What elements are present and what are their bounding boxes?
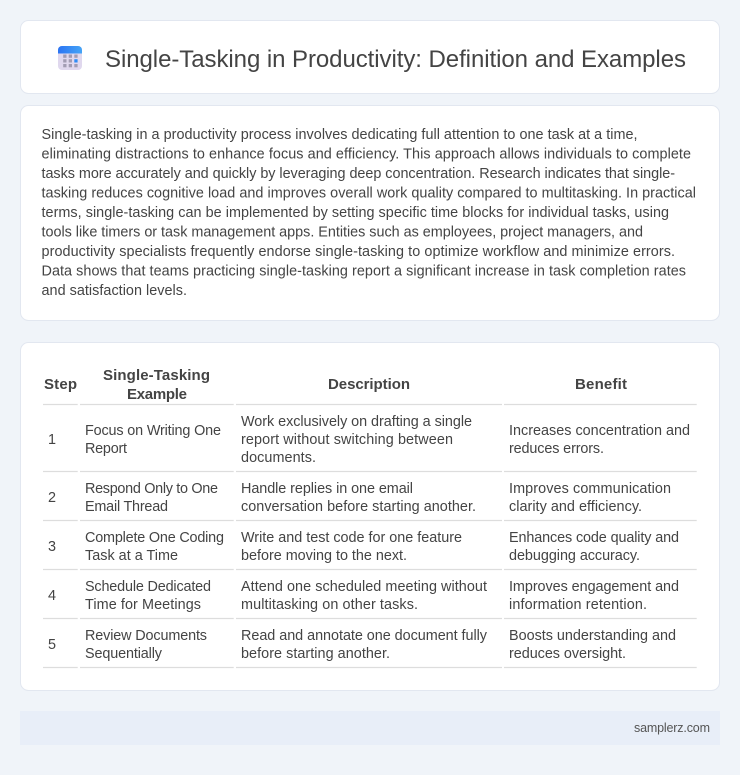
- table row 1: Report: [85, 441, 127, 457]
- text block: definition: and satisfaction levels.: [42, 283, 187, 299]
- text block: definition: productivity specialists frequently endorse single-tasking to optimize workflow and minimize errors.: [42, 244, 675, 260]
- table row 4: Time for Meetings: [85, 597, 201, 613]
- table row 4: information retention.: [509, 597, 647, 613]
- table row 4: Improves engagement and: [509, 579, 679, 595]
- table row 5: Sequentially: [85, 646, 163, 662]
- table row 2: Email Thread: [85, 499, 168, 515]
- table row 5: 5: [48, 637, 56, 653]
- table row 3: Complete One Coding: [85, 530, 224, 546]
- table row 2: [48, 481, 671, 515]
- table row 5: Boosts understanding and: [509, 628, 676, 644]
- table row 4: Attend one scheduled meeting without: [241, 579, 487, 595]
- table row 1: report without switching between: [241, 432, 453, 448]
- text block: definition: eliminating distractions to enhance focus and efficiency. This approach allows individuals to complete: [42, 146, 691, 162]
- table row 2: Respond Only to One: [85, 481, 218, 497]
- header card: [20, 20, 720, 94]
- icon: calendar: [58, 46, 82, 70]
- footer bar: [20, 711, 720, 745]
- table header row: Benefit: [575, 376, 627, 393]
- table row 2: clarity and efficiency.: [509, 499, 642, 515]
- table row 4: Schedule Dedicated: [85, 579, 211, 595]
- table row 5: [48, 628, 676, 662]
- table row 1: [48, 414, 690, 466]
- table row 4: 4: [48, 588, 56, 604]
- text block: definition: Single-tasking in a productivity process involves dedicating full attention to one task at a time,: [42, 127, 638, 143]
- table row 3: [48, 530, 679, 564]
- table row 1: documents.: [241, 450, 316, 466]
- table row 1: 1: [48, 432, 56, 448]
- text block: definition: tasking reduces cognitive load and improves overall work quality compared to multitasking. In practical: [42, 186, 696, 202]
- table row 2: Handle replies in one email: [241, 481, 413, 497]
- footer text: samplerz.com: [634, 721, 710, 735]
- table header row: Single-Tasking: [103, 367, 210, 384]
- panel: examples table: [20, 342, 720, 690]
- panel: intro paragraph: [20, 106, 720, 320]
- table row 3: debugging accuracy.: [509, 548, 640, 564]
- table row 1: Increases concentration and: [509, 423, 690, 439]
- table row 5: Review Documents: [85, 628, 207, 644]
- table row lines: [43, 404, 697, 668]
- table row 5: Read and annotate one document fully: [241, 628, 488, 644]
- table row 1: reduces errors.: [509, 441, 604, 457]
- table row 3: Write and test code for one feature: [241, 530, 462, 546]
- table header row: Description: [328, 376, 410, 393]
- title: Single-Tasking in Productivity: Definition and Examples: [105, 46, 686, 73]
- table header row: [44, 367, 627, 403]
- text block: definition: tasks more accurately and quickly by leveraging deep concentration. Research indicates that single-: [42, 166, 675, 182]
- table row 1: Work exclusively on drafting a single: [241, 414, 472, 430]
- table row 3: 3: [48, 539, 56, 555]
- table row 4: [48, 579, 679, 613]
- text block: definition: Data shows that teams practicing single-tasking report a significant increase in task completion rates: [42, 264, 686, 280]
- table row 5: before starting another.: [241, 646, 390, 662]
- table row 2: 2: [48, 490, 56, 506]
- text block: definition: terms, single-tasking can be implemented by setting specific time blocks for individual tasks, using: [42, 205, 669, 221]
- table header row: Step: [44, 376, 77, 393]
- table row 2: conversation before starting another.: [241, 499, 476, 515]
- table row 3: Enhances code quality and: [509, 530, 679, 546]
- table row 1: Focus on Writing One: [85, 423, 221, 439]
- table row 2: Improves communication: [509, 481, 671, 497]
- table row 4: multitasking on other tasks.: [241, 597, 418, 613]
- table row 3: before moving to the next.: [241, 548, 407, 564]
- text block: definition: tools like timers or task management apps. Entities such as employees, project managers, and: [42, 224, 643, 240]
- text block: definition: [42, 127, 696, 299]
- table header row: Example: [127, 386, 187, 403]
- table row 3: Task at a Time: [85, 548, 178, 564]
- table row 5: reduces oversight.: [509, 646, 626, 662]
